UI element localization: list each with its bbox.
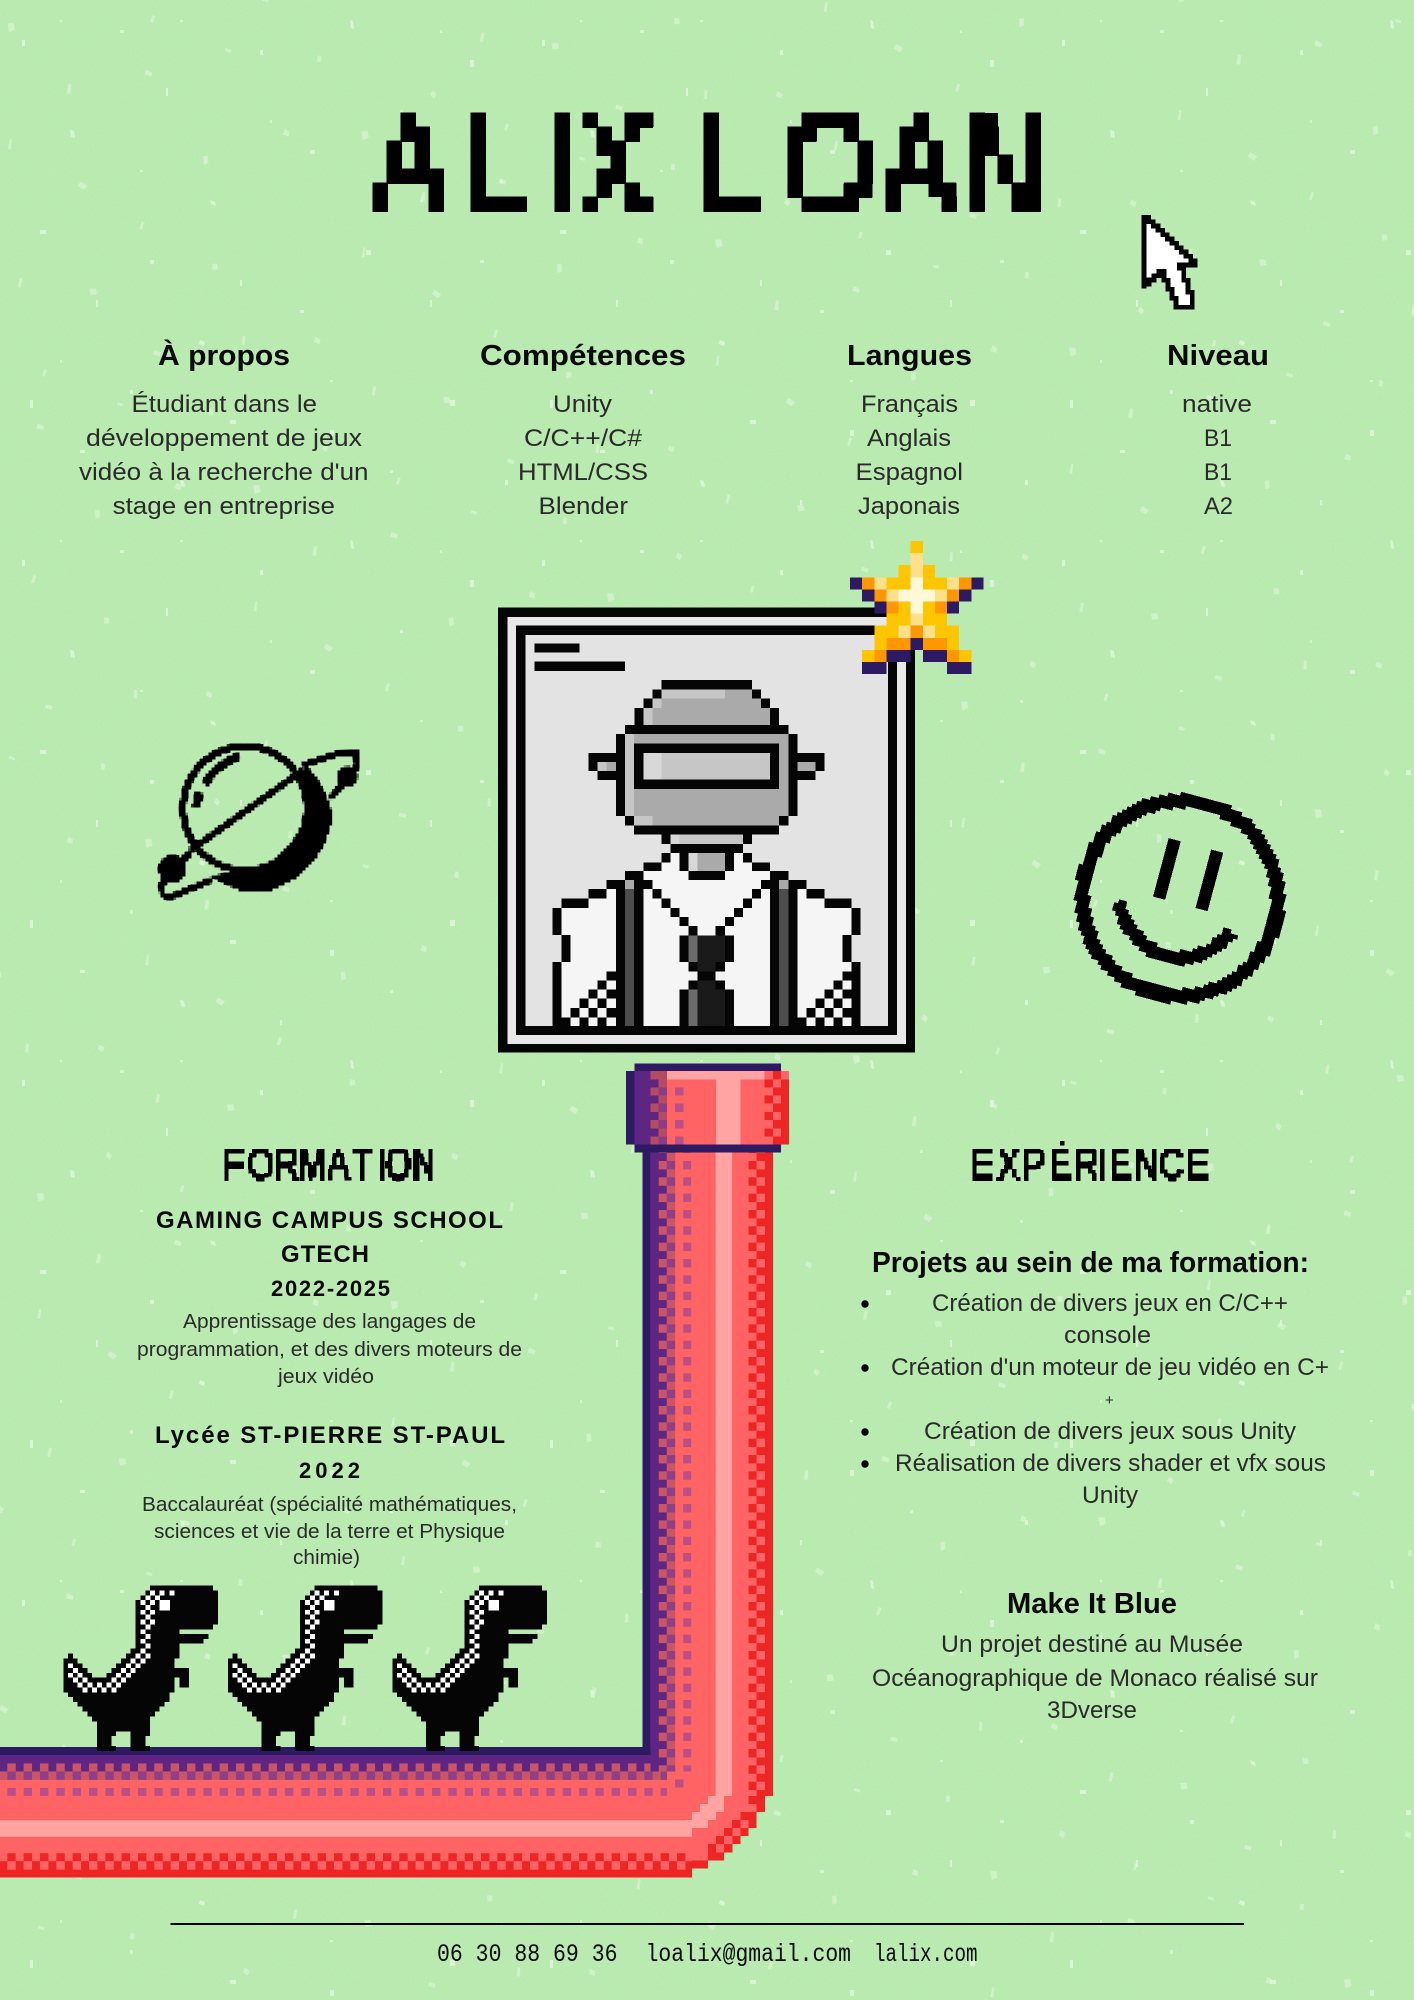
entry: gaming campus: GTECH <box>281 1241 369 1268</box>
section: niveau <box>1167 340 1269 520</box>
footer: email: loalix@gmail.com <box>646 1940 851 1969</box>
list: projets: console <box>1064 1322 1151 1349</box>
pipe: horizontal run <box>0 1747 692 1877</box>
text: à propos body: développement de jeux <box>86 425 362 452</box>
text: make it blue <box>872 1631 1318 1724</box>
footer: phone: 06 30 88 69 36 <box>437 1940 618 1969</box>
icon: star <box>850 541 983 674</box>
heading: à propos: À propos <box>158 338 290 372</box>
title: ALIX <box>373 82 653 248</box>
text: à propos body <box>79 391 368 520</box>
text: make it blue: Un projet destiné au Musée <box>941 1631 1243 1658</box>
entry: gaming campus: jeux vidéo <box>277 1366 374 1388</box>
text: à propos body: stage en entreprise <box>113 493 335 520</box>
heading: formation: FORMATION <box>223 1141 436 1189</box>
icon: dino 3 <box>392 1586 547 1751</box>
entry: lycée <box>142 1422 517 1569</box>
list: projets: Création de divers jeux en C/C++ <box>932 1290 1288 1317</box>
list: projets: Création d'un moteur de jeu vidéo en C+ <box>891 1354 1329 1381</box>
list: languages: Anglais <box>867 425 951 452</box>
heading: projets: Projets au sein de ma formation: <box>872 1247 1309 1279</box>
list: languages <box>856 391 963 520</box>
list: languages: Japonais <box>858 493 960 520</box>
list: skills: HTML/CSS <box>518 459 648 486</box>
pipe: cap <box>626 1063 789 1153</box>
section: expérience <box>861 1141 1329 1724</box>
list: projets: + <box>1105 1392 1114 1409</box>
section: à propos <box>79 338 368 520</box>
entry: gaming campus: 2022-2025 <box>271 1276 390 1301</box>
text: make it blue: Océanographique de Monaco réalisé sur <box>872 1665 1318 1692</box>
entry: gaming campus: GAMING CAMPUS SCHOOL <box>156 1207 503 1234</box>
portrait: helmeted character <box>552 680 861 1026</box>
entry: gaming campus: programmation, et des divers moteurs de <box>137 1339 522 1361</box>
entry: gaming campus <box>137 1207 522 1388</box>
footer <box>170 1923 1244 1969</box>
list: projets: Création de divers jeux sous Unity <box>924 1418 1296 1445</box>
entry: lycée: 2022 <box>299 1458 360 1483</box>
icon: smiley <box>1034 752 1326 1045</box>
pipe: inner bend <box>650 1747 692 1771</box>
list: levels: A2 <box>1204 493 1233 520</box>
heading: expérience: EXPÉRIENCE <box>971 1141 1209 1189</box>
entry: lycée: sciences et vie de la terre et Physique <box>154 1521 505 1543</box>
heading: compétences: Compétences <box>480 340 686 372</box>
icon: dino 2 <box>228 1586 382 1751</box>
entry: lycée: chimie) <box>293 1547 360 1569</box>
list: skills: Blender <box>538 493 628 520</box>
list: levels: native <box>1182 391 1252 418</box>
list: skills: Unity <box>553 391 612 418</box>
icon: dino 1 <box>63 1586 218 1751</box>
icon: mouse cursor <box>1144 217 1195 307</box>
title <box>373 82 1046 248</box>
list: languages: Français <box>861 391 958 418</box>
heading: langues: Langues <box>847 340 972 372</box>
text: à propos body: Étudiant dans le <box>132 391 317 418</box>
section: compétences <box>480 340 686 520</box>
list: projets <box>861 1290 1329 1509</box>
list: skills: C/C++/C# <box>524 425 643 452</box>
dinosaurs <box>63 1586 547 1751</box>
heading: make it blue: Make It Blue <box>1007 1588 1177 1620</box>
pipe: outer bend <box>667 1771 765 1868</box>
section: formation <box>137 1141 522 1569</box>
list: levels: B1 <box>1204 459 1232 486</box>
portrait frame <box>498 607 915 1053</box>
list: projets: Unity <box>1082 1482 1138 1509</box>
list: levels <box>1182 391 1252 520</box>
list: levels: B1 <box>1204 425 1232 452</box>
entry: lycée: Baccalauréat (spécialité mathématiques, <box>142 1494 517 1516</box>
title: LOAN <box>702 82 1046 248</box>
section: langues <box>847 340 972 520</box>
text: make it blue: 3Dverse <box>1047 1697 1137 1724</box>
heading: niveau: Niveau <box>1167 340 1269 372</box>
text: à propos body: vidéo à la recherche d'un <box>79 459 368 486</box>
pipe: vertical shaft <box>642 1150 773 1796</box>
icon: planet <box>159 746 357 897</box>
list: projets: Réalisation de divers shader et vfx sous <box>895 1450 1326 1477</box>
entry: lycée: Lycée ST-PIERRE ST-PAUL <box>155 1422 505 1449</box>
pipe <box>0 1063 789 1877</box>
footer: website: lalix.com <box>874 1940 978 1969</box>
entry: gaming campus: Apprentissage des langages de <box>183 1311 476 1333</box>
list: skills <box>518 391 648 520</box>
list: languages: Espagnol <box>856 459 963 486</box>
